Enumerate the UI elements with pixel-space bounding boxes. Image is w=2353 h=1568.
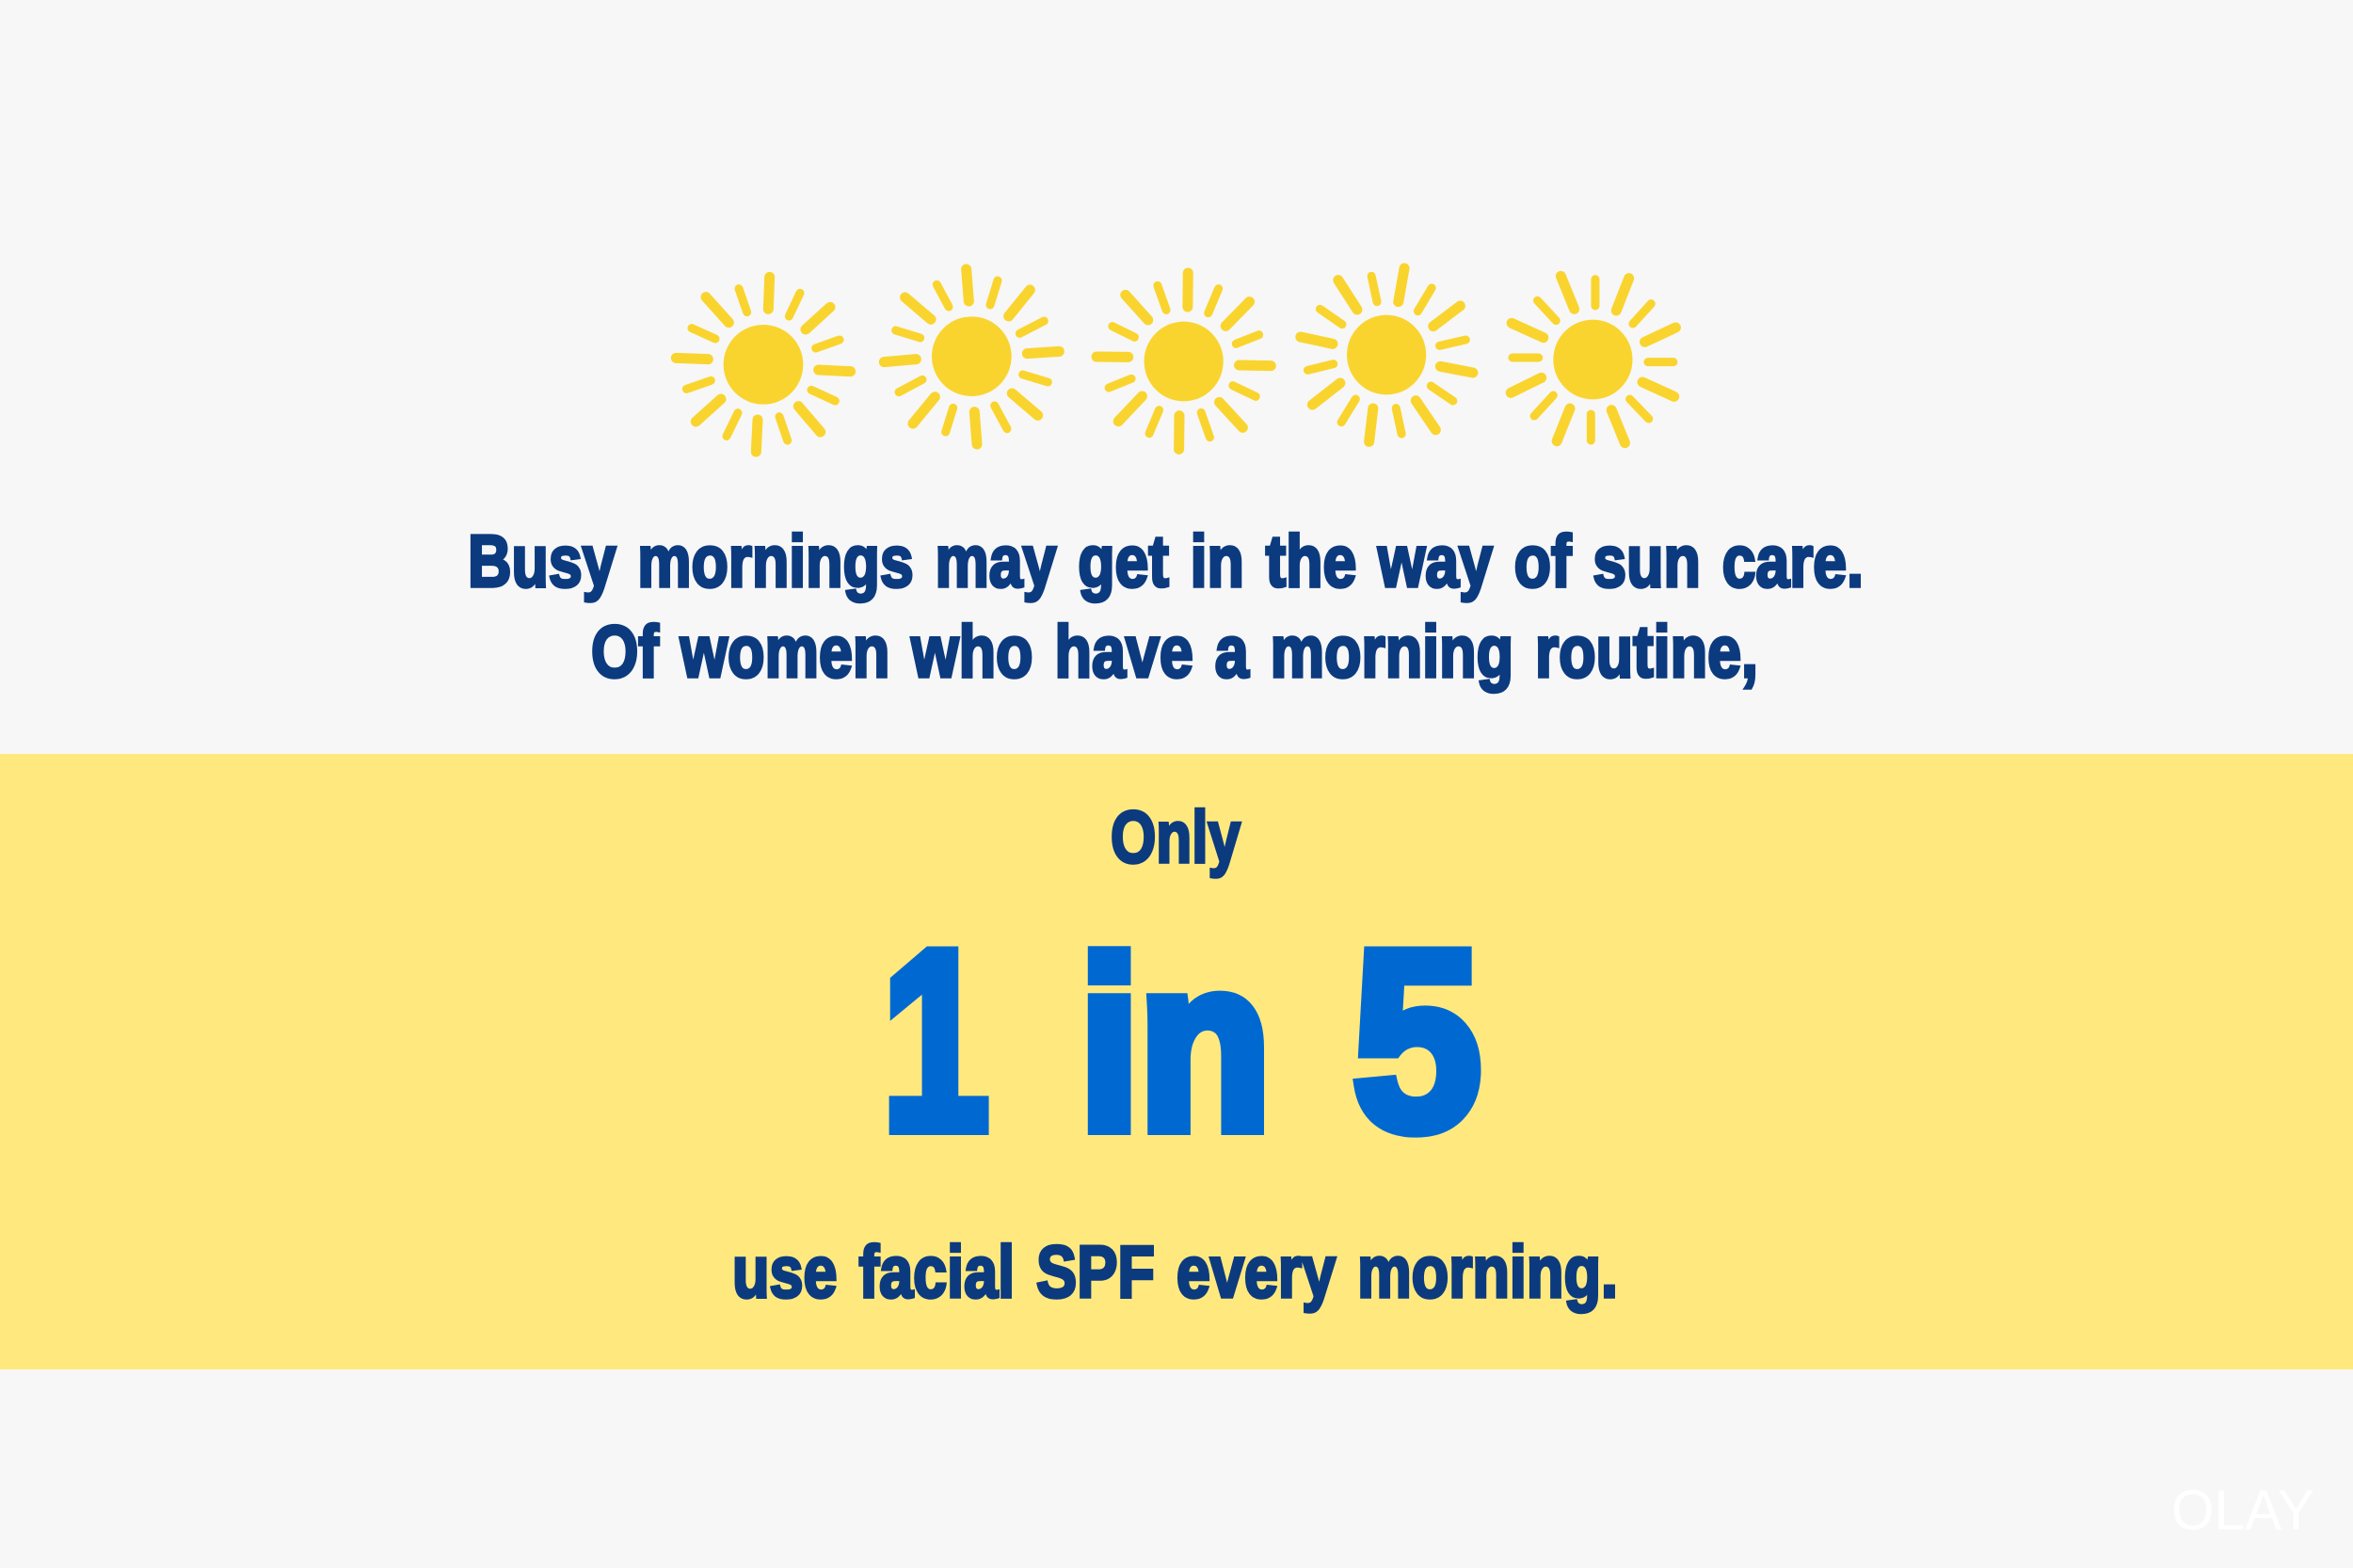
icon: sun 2 — [884, 269, 1059, 444]
icon: sun 4 — [1301, 268, 1473, 441]
logo: OLAY: OLAY — [2171, 1479, 2314, 1542]
panel: yellow statistic band — [0, 754, 2353, 1369]
statistic: 1 in 5: in — [1080, 911, 1271, 1179]
heading: busy mornings: Of women who have a morning routine, — [591, 610, 1758, 693]
icon row: five suns — [676, 268, 1675, 452]
icon: sun 3 — [1096, 273, 1271, 449]
heading: busy mornings: Busy mornings may get in the way of sun care. — [468, 520, 1864, 602]
text: use facial SPF: use facial SPF every morning. — [732, 1230, 1618, 1313]
heading: busy mornings — [468, 520, 1864, 693]
statistic: 1 in 5: 5 — [1353, 899, 1481, 1183]
icon: sun 5 — [1511, 276, 1675, 443]
icon: sun 1 — [676, 277, 851, 452]
statistic: 1 in 5 — [882, 899, 1481, 1183]
text: only: Only — [1111, 795, 1241, 878]
statistic: 1 in 5: 1 — [882, 899, 989, 1183]
